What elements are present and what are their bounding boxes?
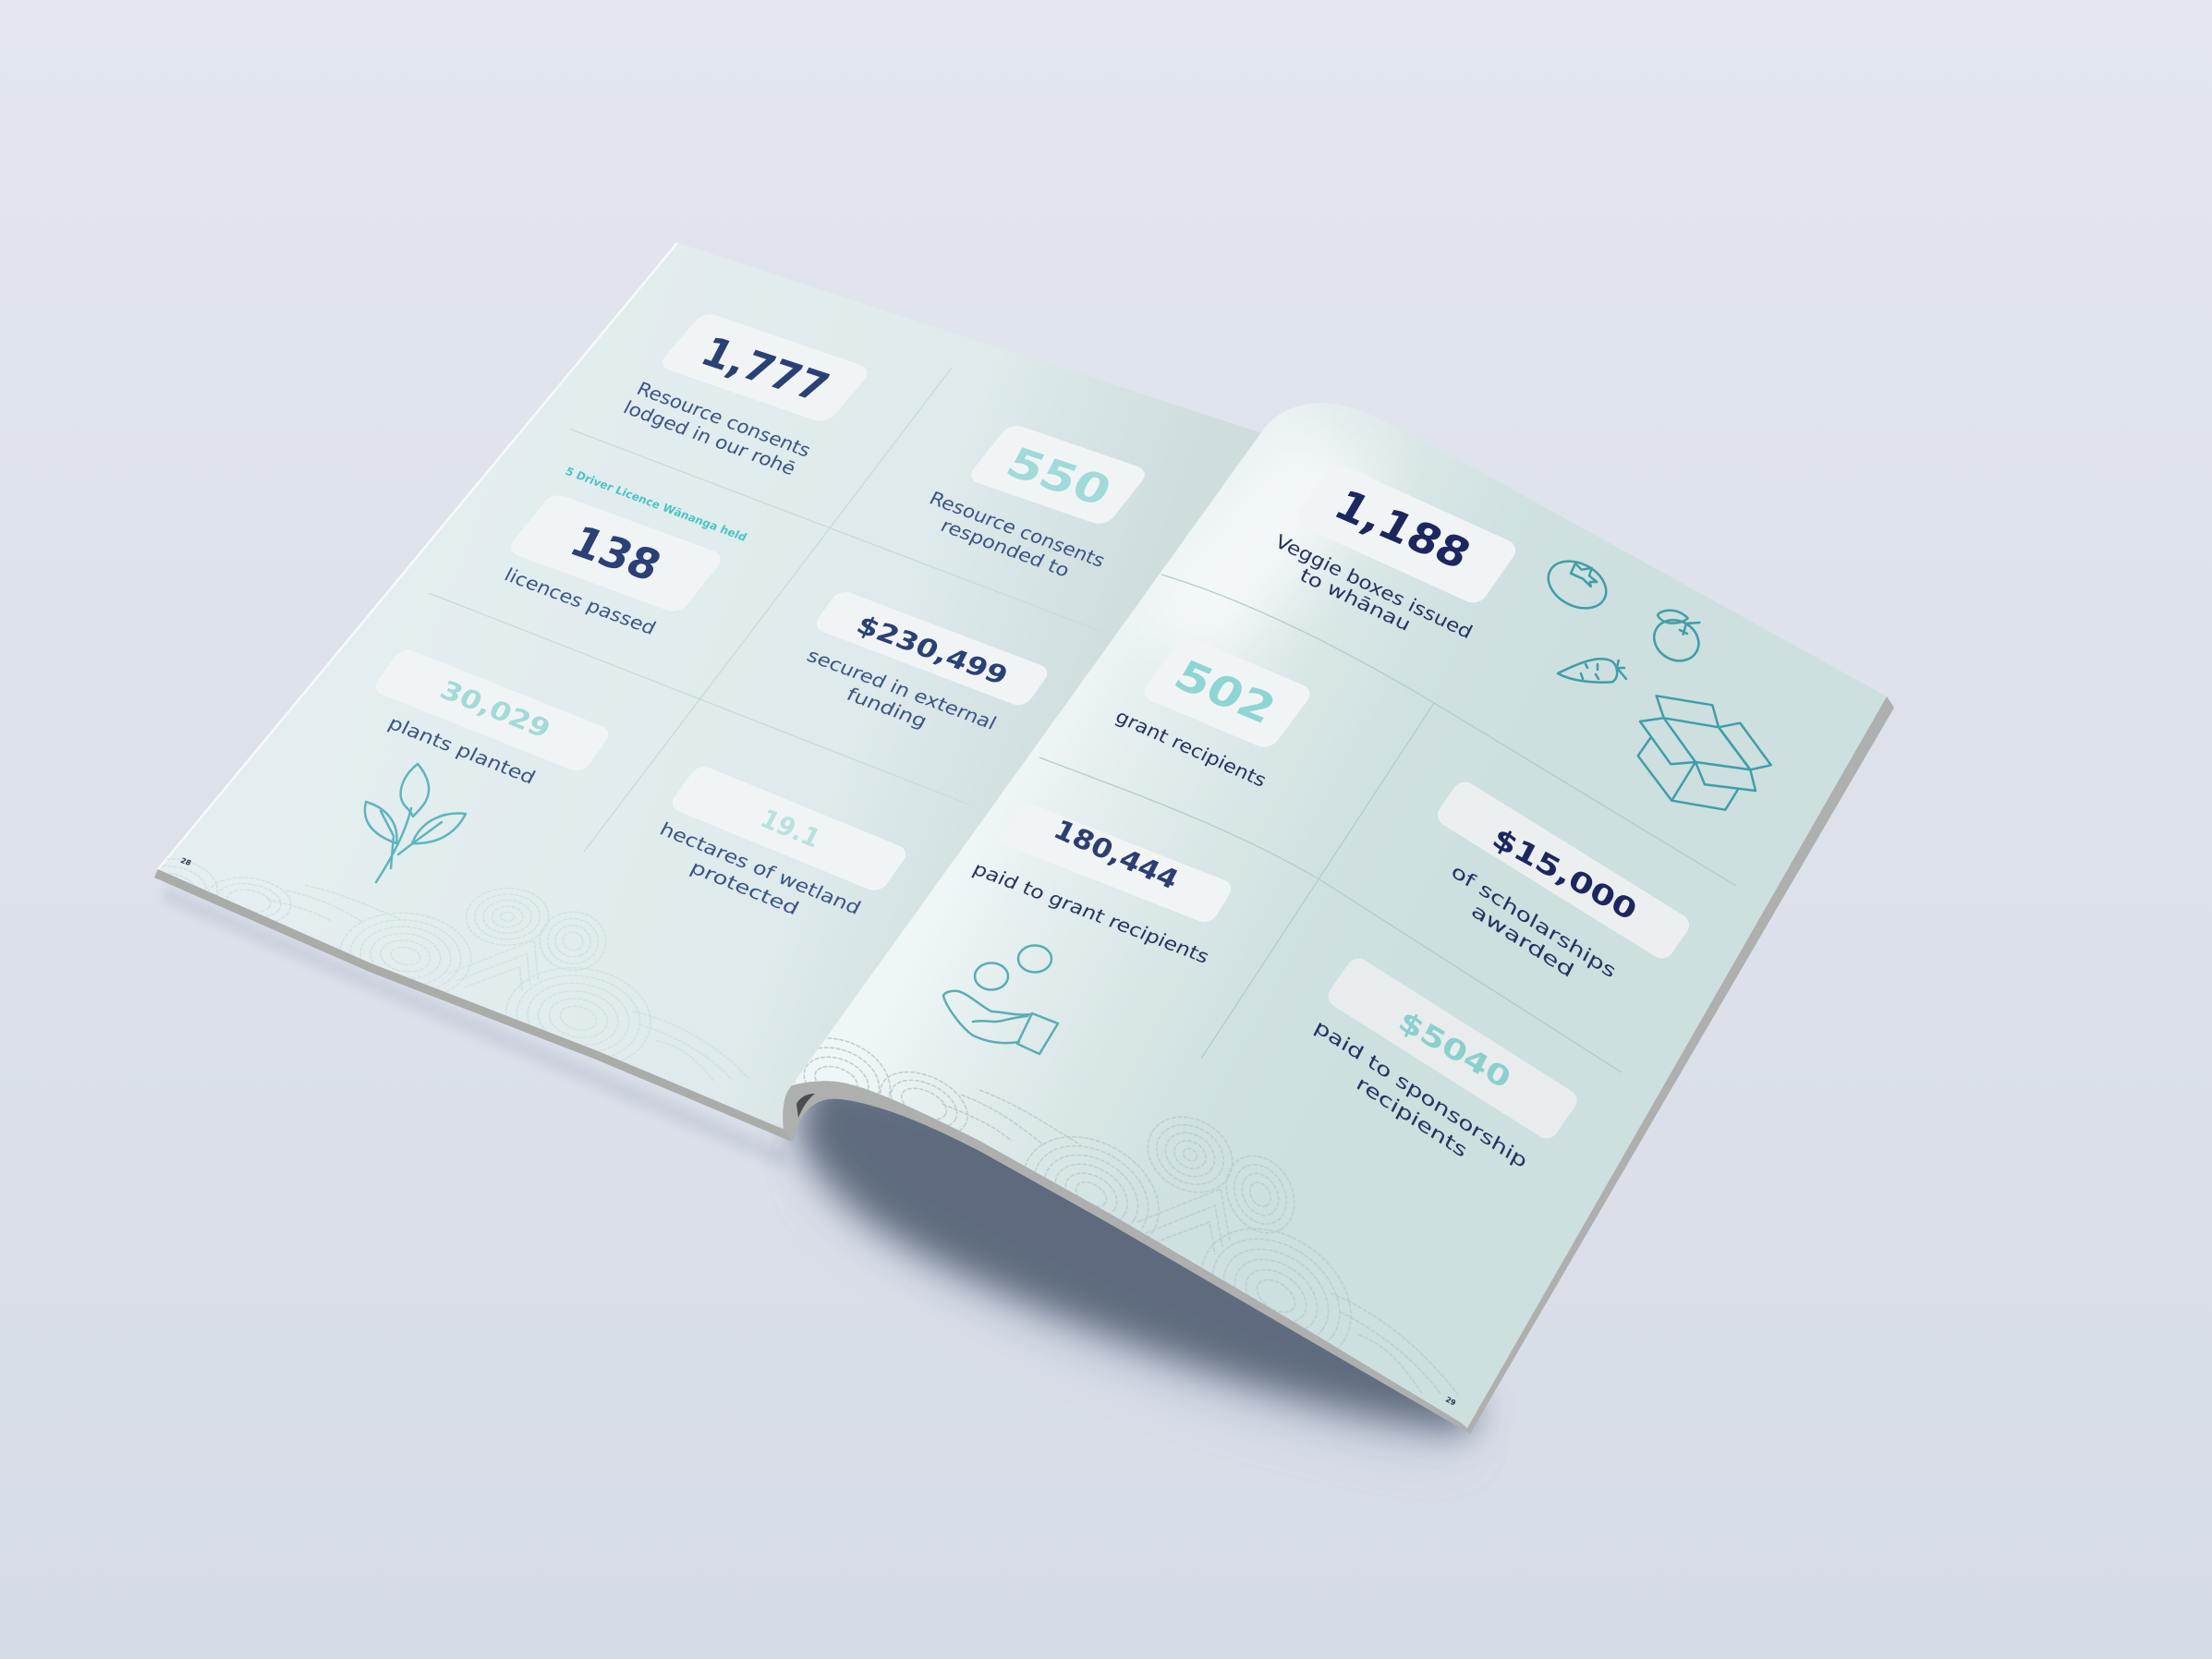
stat: 1,777 resource consents (620, 311, 873, 479)
left page edge thickness (154, 869, 792, 1142)
stat: $15,000 scholarships (1433, 778, 1694, 983)
icon: carrot (1558, 659, 1626, 683)
stat: 1,188 veggie boxes (1271, 461, 1521, 643)
stat: 30,029 plants planted: plants planted (384, 712, 540, 788)
page number 28: 28 (179, 856, 193, 867)
stat: 19.1 hectares of wetland: protected (687, 856, 803, 919)
driver licence note: 5 Driver Licence Wānanga held (563, 465, 749, 544)
stat: 1,188 veggie boxes: 1,188 (1326, 480, 1479, 578)
stat: 1,188 veggie boxes: Veggie boxes issued (1271, 530, 1477, 643)
page curl highlight (1168, 433, 1379, 655)
stat: 30,029 plants planted (371, 647, 614, 788)
icon: plant (365, 764, 466, 882)
stat: $230,499 secured: funding (843, 684, 931, 732)
stat: 180,444 paid to grant recipients: 180,444 (1049, 814, 1184, 895)
stat: 550 resource consents responded (926, 423, 1150, 581)
stat: 1,777 resource consents: lodged in our rohē (620, 396, 799, 479)
stat: $230,499 secured: secured in external (803, 644, 1001, 734)
right page sheet (792, 403, 1887, 1428)
stat: 138 licences passed (501, 465, 749, 639)
panel: left page (157, 242, 1260, 1129)
stat: $15,000 scholarships: $15,000 (1487, 822, 1642, 927)
stat: 180,444 paid to grant recipients (969, 802, 1235, 968)
stat: $15,000 scholarships: of scholarships (1448, 859, 1620, 983)
stat: $5040 sponsorship: $5040 (1393, 1005, 1515, 1096)
icon: apple (1647, 611, 1706, 669)
page number 29: 29 (1444, 1395, 1457, 1408)
panel: right page (771, 403, 1887, 1428)
stat: $230,499 secured (803, 588, 1052, 734)
stat: 180,444 paid to grant recipients: paid to grant recipients (969, 857, 1213, 968)
soft shadow halo under right page (813, 1155, 1469, 1446)
spine inner gap (796, 1094, 815, 1118)
koru pattern left (67, 793, 785, 1139)
icon: hand with coins (943, 946, 1058, 1054)
shadow under right page (796, 1062, 1478, 1434)
spine curl and right page edge thickness (783, 696, 1894, 1434)
right grid lines (1039, 575, 1736, 1072)
left grid lines (429, 368, 1100, 852)
left page sheet (158, 243, 1294, 1129)
stat: 19.1 hectares of wetland: 19.1 (755, 804, 826, 854)
stat: 1,777 resource consents: 1,777 (693, 328, 837, 411)
stat: 138 licences passed: 138 (562, 517, 669, 591)
stat: 550 resource consents responded: responded to (937, 515, 1074, 581)
stat: 1,777 resource consents: Resource consents (633, 378, 815, 461)
koru pattern right (771, 1023, 1458, 1395)
stat: 502 grant recipients: 502 (1166, 650, 1284, 733)
faint contact shadow under left page (162, 887, 785, 1169)
stat: $5040 sponsorship: recipients (1353, 1072, 1471, 1162)
stat: 1,188 veggie boxes: to whānau (1296, 563, 1415, 636)
stat: 502 grant recipients: grant recipients (1112, 705, 1270, 792)
stat: 550 resource consents responded: 550 (998, 438, 1120, 515)
stat: $15,000 scholarships: awarded (1468, 899, 1577, 982)
stat: 30,029 plants planted: 30,029 (435, 674, 555, 745)
stat: $5040 sponsorship (1311, 954, 1582, 1172)
stat: 502 grant recipients (1112, 635, 1315, 792)
stat: $230,499 secured: $230,499 (852, 610, 1013, 691)
stat: $5040 sponsorship: paid to sponsorship (1311, 1015, 1531, 1172)
icon: tomato (1540, 552, 1614, 617)
stat: 19.1 hectares of wetland: hectares of wetland (656, 817, 865, 919)
stat: 138 licences passed: licences passed (501, 563, 660, 639)
stat: 550 resource consents responded: Resource consents (926, 487, 1109, 572)
left page light edge (158, 243, 677, 869)
stat: 19.1 hectares of wetland (656, 763, 911, 919)
icon: open box (1638, 696, 1771, 810)
